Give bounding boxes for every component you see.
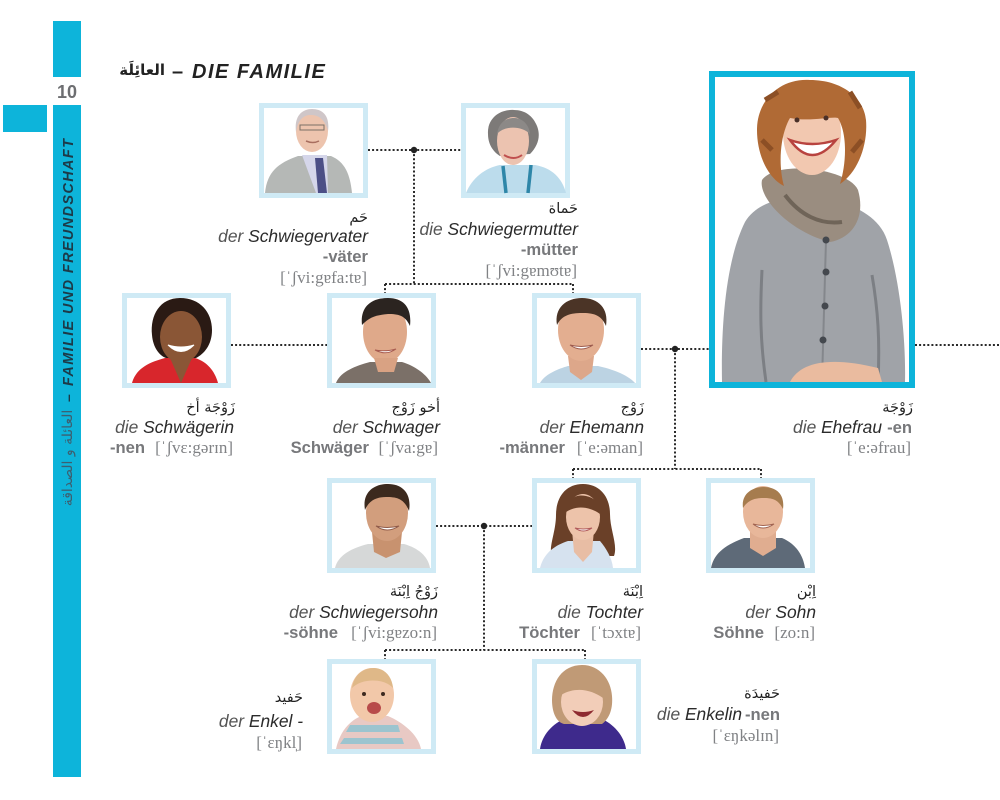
photo: laughing baby in striped top xyxy=(336,668,421,749)
connector lines of the family tree xyxy=(231,147,1000,659)
pronunciation: [ˈʃvi:gɐfa:tɐ] xyxy=(280,268,367,287)
plural: -männer xyxy=(500,438,566,457)
plural: Söhne xyxy=(713,623,764,642)
photo: dark-haired man in sweater xyxy=(336,298,431,383)
plural: -mütter xyxy=(521,240,579,259)
plural: -väter xyxy=(323,247,369,266)
pronunciation: [ˈtɔxtɐ] xyxy=(591,623,641,642)
vertical chapter heading: FAMILIE UND FREUNDSCHAFT xyxy=(61,138,77,386)
Arabic word: حَفيدَة xyxy=(744,686,780,702)
German word: der Sohn xyxy=(745,602,816,622)
person: Enkel xyxy=(219,662,434,752)
title: DIE FAMILIE xyxy=(192,61,326,83)
Arabic word: زَوْجَة أخ xyxy=(186,397,235,416)
plural: Schwäger xyxy=(291,438,370,457)
German word: die Ehefrau xyxy=(793,417,882,437)
pronunciation: [zo:n] xyxy=(774,623,815,642)
person: Schwiegervater xyxy=(218,106,369,287)
Arabic word: اِبْن xyxy=(797,584,816,600)
German word: der Schwiegervater xyxy=(218,226,369,246)
pronunciation: [ˈe:əfrau] xyxy=(847,438,911,457)
sidebar: chapter tab xyxy=(3,21,81,777)
vertical Arabic heading: العائلة و الصداقة xyxy=(60,410,76,506)
German word: die Enkelin xyxy=(657,704,742,724)
pronunciation: [ˈʃvi:gɐzo:n] xyxy=(351,623,437,642)
pronunciation: [ˈɛŋkl̩] xyxy=(256,733,302,752)
photo: older woman with grey hair xyxy=(466,110,566,193)
Arabic word: حَماة xyxy=(549,201,578,217)
photo: smiling man in light-blue shirt xyxy=(540,298,635,383)
photo: older man in grey cardigan xyxy=(265,109,352,193)
title xyxy=(119,61,326,83)
Arabic word: حَم xyxy=(349,210,368,226)
plural: Töchter xyxy=(519,623,581,642)
German word: die Schwägerin xyxy=(115,417,234,437)
person: Enkelin xyxy=(534,662,780,752)
German word: der Enkel - xyxy=(219,711,303,731)
pronunciation: [ˈɛŋkəlɪn] xyxy=(712,726,779,745)
plural: -nen xyxy=(110,438,145,457)
person: Schwiegermutter xyxy=(419,106,579,280)
pronunciation: [ˈe:əman] xyxy=(577,438,643,457)
Arabic word: اِبْنَة xyxy=(623,584,643,600)
German word: die Schwiegermutter xyxy=(419,219,579,239)
vertical dash: – xyxy=(60,394,76,402)
photo: young man in polo shirt xyxy=(335,484,430,568)
photo: laughing toddler in purple top xyxy=(540,665,626,749)
title: – xyxy=(172,61,183,83)
German word: der Schwager xyxy=(333,417,441,437)
Arabic word: حَفيد xyxy=(275,690,303,706)
pronunciation: [ˈʃvi:gɐmʊtɐ] xyxy=(486,261,577,280)
person: Ehefrau xyxy=(712,74,913,457)
pronunciation: [ˈʃva:gɐ] xyxy=(379,438,438,457)
plural: -söhne xyxy=(284,623,338,642)
photo: smiling woman in red top xyxy=(132,298,218,383)
Arabic word: زَوْج xyxy=(621,400,644,417)
person: Schwager xyxy=(291,296,441,457)
plural: -en xyxy=(887,418,912,437)
Arabic word: زَوْجُ اِبْنَة xyxy=(390,584,438,601)
pronunciation: [ˈʃvɛ:gərɪn] xyxy=(155,438,233,457)
plural: -nen xyxy=(745,705,780,724)
person: Schwägerin xyxy=(110,296,235,457)
person: Tochter xyxy=(519,480,644,642)
title: العائِلَة xyxy=(119,61,165,79)
German word: die Tochter xyxy=(558,602,644,622)
German word: der Ehemann xyxy=(540,417,644,437)
Arabic word: زَوْجَة xyxy=(882,400,913,416)
person: Sohn xyxy=(708,480,816,642)
photo: young woman with long brown hair xyxy=(540,484,615,568)
person: Schwiegersohn xyxy=(284,480,438,642)
page number: 10 xyxy=(57,82,77,102)
German word: der Schwiegersohn xyxy=(289,602,438,622)
photo: young blond man in checked shirt xyxy=(711,486,805,568)
person: Ehemann xyxy=(500,296,644,457)
photo: smiling woman in grey jacket xyxy=(722,80,905,382)
Arabic word: أخو زَوْج xyxy=(392,397,440,417)
